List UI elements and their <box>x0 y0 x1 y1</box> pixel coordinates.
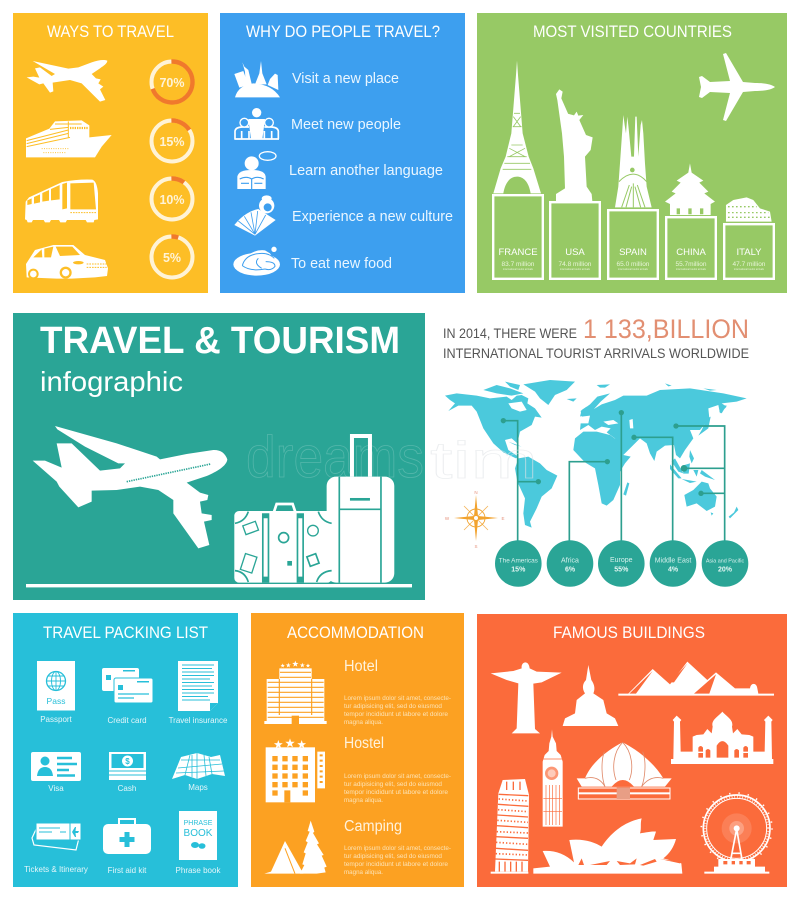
heading: travel packing list: TRAVEL PACKING LIST <box>43 623 208 642</box>
item: cash: Cash <box>118 784 136 793</box>
panel: travel packing list <box>13 613 238 887</box>
item: visa: Visa <box>48 784 64 793</box>
heading: why do people travel: WHY DO PEOPLE TRAVEL? <box>246 22 440 41</box>
panel: title banner <box>13 313 425 600</box>
panel: ways to travel <box>13 13 208 293</box>
landmark: Colosseum <box>726 197 772 222</box>
text: hostel: magna aliqua. <box>344 797 383 804</box>
icon: airplane <box>27 60 107 102</box>
ground line <box>26 584 412 587</box>
bar: China: CHINA <box>676 247 706 258</box>
text: experience a new culture: Experience a new culture <box>292 208 453 225</box>
bar: USA: 74.8 million <box>559 261 592 268</box>
headline: arrivals statistic <box>443 314 749 361</box>
watermark: dreams <box>246 425 424 490</box>
landmark: Big Ben <box>543 729 563 827</box>
heading: accommodation: ACCOMMODATION <box>287 623 424 642</box>
ring: 70 percent: 70% <box>159 76 185 90</box>
buildings artwork <box>491 662 774 874</box>
item: phrase book: Phrase book <box>176 866 221 875</box>
item: credit card <box>102 668 153 725</box>
headline: arrivals statistic: 1 133,BILLION <box>583 314 749 344</box>
landmark: London Eye <box>701 793 772 874</box>
bar: China: international tourist arrivals <box>676 268 707 271</box>
item: phrase book: BOOK <box>184 828 213 839</box>
item: first aid kit: First aid kit <box>108 866 147 875</box>
icon: tent and pine tree <box>264 821 327 874</box>
icon: compass rose: E <box>501 516 505 521</box>
landmark: Sydney Opera House <box>533 818 682 874</box>
bar: Spain <box>608 210 658 279</box>
landmark: Taj Mahal <box>671 712 773 764</box>
icon: compass rose: W <box>445 516 450 521</box>
landmark: Leaning Tower of Pisa <box>491 779 529 874</box>
text: to eat new food: To eat new food <box>291 255 392 272</box>
text: meet new people: Meet new people <box>291 116 401 133</box>
text: camping <box>344 818 451 876</box>
region circle: Europe: 55% <box>614 566 629 574</box>
map: eastern continents <box>573 383 747 518</box>
icon: airplane <box>699 53 775 121</box>
text: camping: Camping <box>344 818 402 835</box>
landmark: pyramids and sphinx <box>618 662 774 696</box>
bar: Spain: 65.0 million <box>617 261 650 268</box>
bar: USA: USA <box>565 247 585 258</box>
region circle: Asia and Pacific <box>702 540 748 587</box>
item: tickets and itinerary: Tickets & Itinerary <box>24 865 88 874</box>
item: tickets and itinerary <box>24 823 88 874</box>
item: passport: Pass <box>47 696 65 706</box>
text: camping: Lorem ipsum dolor sit amet, consecte- <box>344 845 451 852</box>
item: credit card: Credit card <box>107 716 147 725</box>
text: hostel <box>344 735 451 804</box>
icon: roast on a plate <box>233 247 280 276</box>
region circle: The Americas <box>495 540 542 587</box>
ring: 10 percent: 10% <box>159 193 185 207</box>
icon: reader with speech bubble <box>237 152 276 189</box>
icon: meeting people <box>234 108 279 139</box>
text: learn another language: Learn another language <box>289 162 443 179</box>
heading: famous buildings: FAMOUS BUILDINGS <box>553 623 705 642</box>
icon: fan and hair ornament <box>234 195 276 236</box>
bar: Spain: SPAIN <box>619 247 647 258</box>
icon: compass rose <box>445 490 505 549</box>
text: hotel: Hotel <box>344 658 378 675</box>
text: hostel: tempor incididunt ut labore et dolore <box>344 789 448 796</box>
item: maps <box>172 753 225 792</box>
heading: most visited countries: MOST VISITED COUNTRIES <box>533 22 732 41</box>
bar: Italy: international tourist arrivals <box>734 268 765 271</box>
text: hostel: Hostel <box>344 735 384 752</box>
text: visit a new place: Visit a new place <box>292 70 399 87</box>
landmark: Sagrada Familia <box>615 115 652 207</box>
bar: Spain: international tourist arrivals <box>618 268 649 271</box>
bar: China <box>666 217 716 279</box>
region circle: Asia and Pacific: 20% <box>718 566 733 574</box>
text: hotel <box>344 658 451 726</box>
region circle: Europe: Europe <box>610 557 633 564</box>
landmark: Buddha <box>563 665 618 726</box>
icon: hostel <box>266 738 325 802</box>
icon: car <box>26 245 108 279</box>
text: hotel: tempor incididunt ut labore et dolore <box>344 711 448 718</box>
text: hotel: magna aliqua. <box>344 719 383 726</box>
panel: accommodation <box>251 613 464 887</box>
text: hotel: tur adipisicing elit, sed do eiusmod <box>344 703 442 710</box>
icon: bus <box>25 180 98 222</box>
bar: USA: international tourist arrivals <box>560 268 591 271</box>
icon: vintage suitcase with stickers <box>234 504 332 583</box>
item: travel insurance: Travel insurance <box>169 716 228 725</box>
text: camping: tempor incididunt ut labore et dolore <box>344 861 448 868</box>
landmark: Temple of Heaven <box>665 163 715 215</box>
landmark: Christ the Redeemer <box>491 662 562 733</box>
landmark: Lotus Temple <box>577 742 672 799</box>
bar: Italy: ITALY <box>736 247 762 258</box>
icon: hotel <box>264 661 327 724</box>
region circle: Europe <box>598 540 645 587</box>
item: passport: Passport <box>40 715 73 724</box>
title: TRAVEL & TOURISM <box>40 320 400 362</box>
callout dots <box>501 410 704 496</box>
item: visa <box>31 752 81 793</box>
item: travel insurance <box>169 661 228 725</box>
ring: 5 percent: 5% <box>163 251 181 265</box>
subtitle: infographic <box>40 366 183 397</box>
item: maps: Maps <box>188 783 208 792</box>
ring: 15 percent <box>152 120 192 162</box>
item: phrase book <box>176 811 221 875</box>
panel: famous buildings <box>477 614 787 887</box>
region circle: Africa <box>547 540 593 587</box>
headline: arrivals statistic: IN 2014, THERE WERE <box>443 325 577 341</box>
item: cash <box>109 752 146 793</box>
icon: rolling suitcase <box>327 436 394 583</box>
ring: 5 percent <box>152 236 192 278</box>
watermark: tim <box>430 432 538 490</box>
bar: Italy <box>724 224 774 279</box>
item: first aid kit <box>103 819 151 875</box>
icon: large airplane <box>33 426 227 548</box>
landmark: Statue of Liberty <box>556 89 593 201</box>
text: camping: tur adipisicing elit, sed do eiusmod <box>344 853 442 860</box>
map: western continents <box>445 380 577 528</box>
heading: ways to travel: WAYS TO TRAVEL <box>47 22 174 41</box>
item: phrase book: PHRASE <box>184 820 213 827</box>
bar: France: international tourist arrivals <box>503 268 534 271</box>
item: passport <box>37 661 75 724</box>
panel: why do people travel <box>220 13 465 293</box>
bar: China: 55.7million <box>675 261 707 268</box>
text: hostel: Lorem ipsum dolor sit amet, consecte- <box>344 773 451 780</box>
item: cash: $ <box>125 757 130 766</box>
bar: USA <box>550 202 600 279</box>
icon: landmarks on globe <box>234 61 280 97</box>
ring: 70 percent <box>152 62 192 102</box>
region circle: Africa: 6% <box>565 566 576 574</box>
text: hostel: tur adipisicing elit, sed do eiusmod <box>344 781 442 788</box>
bar: France <box>493 195 543 279</box>
region circle: Middle East <box>650 540 696 587</box>
ring: 15 percent: 15% <box>159 135 185 149</box>
icon: compass rose: S <box>474 544 478 549</box>
text: camping: magna aliqua. <box>344 869 383 876</box>
ring: 10 percent <box>152 178 192 220</box>
region circle: Middle East: 4% <box>668 566 679 574</box>
bar: France: FRANCE <box>498 247 538 258</box>
icon: compass rose: N <box>474 490 478 495</box>
callout lines <box>503 413 725 542</box>
panel: most visited countries <box>477 13 787 293</box>
headline: arrivals statistic: INTERNATIONAL TOURIST ARRIVALS WORLDWIDE <box>443 345 749 361</box>
region circle: Asia and Pacific: Asia and Pacific <box>706 558 744 564</box>
text: hotel: Lorem ipsum dolor sit amet, consecte- <box>344 695 451 702</box>
icon: cruise ship <box>26 120 112 157</box>
landmark: Eiffel Tower <box>493 61 541 193</box>
region circle: The Americas: The Americas <box>499 558 538 564</box>
region circle: Middle East: Middle East <box>655 558 691 564</box>
bar: France: 83.7 million <box>502 261 535 268</box>
bar: Italy: 47.7 million <box>733 261 766 268</box>
region circle: Africa: Africa <box>561 558 579 564</box>
region circle: The Americas: 15% <box>511 566 526 574</box>
